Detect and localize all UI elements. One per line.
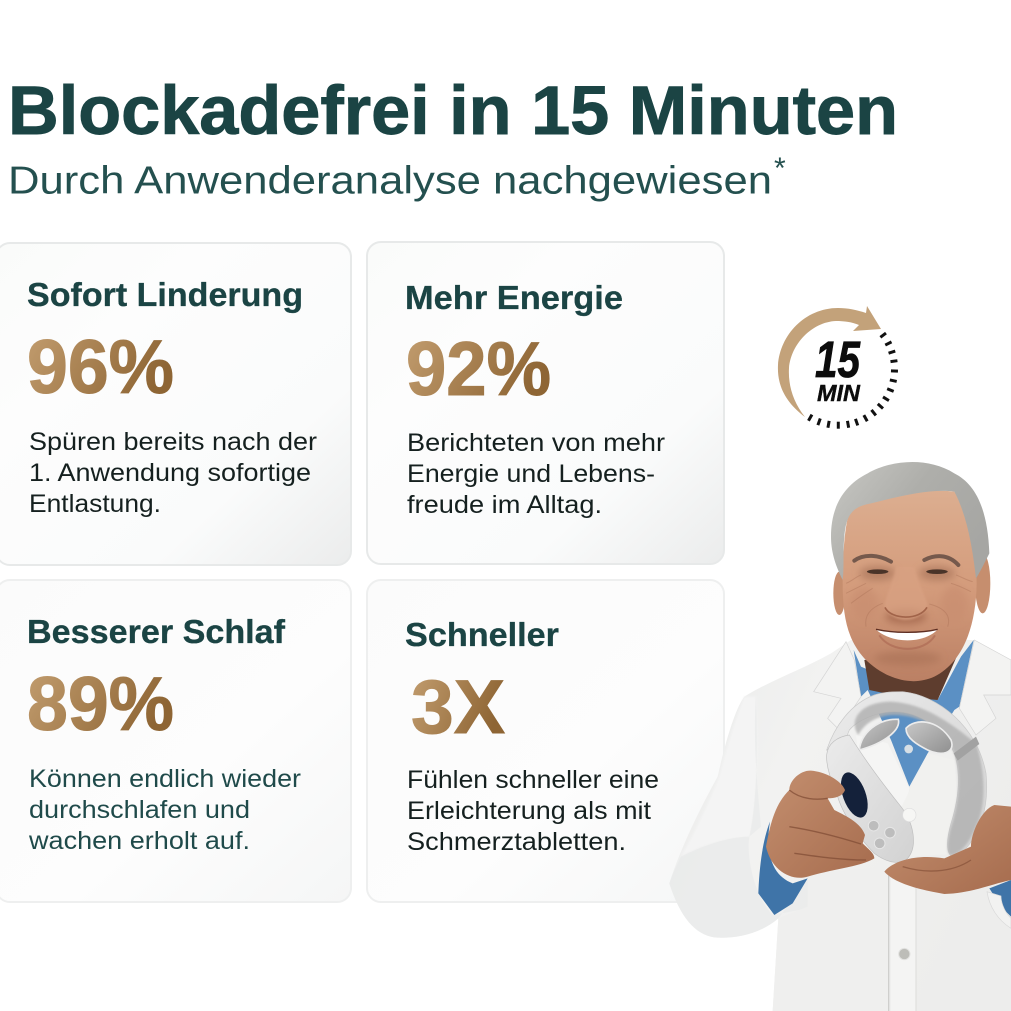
text: Schneller description: Schmerztabletten. (407, 828, 626, 856)
stat: 92%: 92% (406, 327, 551, 412)
timer ticks (807, 332, 898, 429)
heading: Besserer Schlaf: Besserer Schlaf (27, 613, 286, 650)
face (843, 491, 977, 681)
shirt and neck (854, 640, 974, 787)
left hand (766, 771, 874, 878)
text: Mehr Energie description: Energie und Lebens- (407, 460, 655, 488)
coat and shirt buttons (899, 745, 916, 960)
eyes (867, 569, 948, 574)
display (836, 769, 873, 821)
panel: Mehr Energie (367, 242, 724, 564)
eyebrows (854, 556, 958, 565)
text: Besserer Schlaf description (28, 765, 301, 855)
text: Sofort Linderung description: Spüren bereits nach der (29, 428, 317, 456)
stat: 3X: 3X (411, 665, 505, 750)
wrinkles (846, 575, 973, 627)
text: Besserer Schlaf description: Können endlich wieder (29, 765, 301, 793)
arrow arc (778, 306, 881, 417)
smile (876, 629, 938, 649)
control body (827, 735, 913, 862)
text: Sofort Linderung description: 1. Anwendung sofortige (29, 459, 311, 487)
heading: Sofort Linderung: Sofort Linderung (27, 276, 303, 313)
text: Mehr Energie description: Berichteten von mehr (407, 429, 665, 457)
panel: Schneller (367, 580, 724, 902)
stat: 96%: 96% (27, 325, 174, 410)
text: Mehr Energie description: freude im Alltag. (407, 491, 602, 519)
shirt cuffs (758, 822, 1011, 917)
neck massager (827, 692, 987, 862)
panel: Besserer Schlaf (0, 580, 351, 902)
title: Blockadefrei in 15 Minuten (8, 72, 898, 149)
text: Schneller description: Erleichterung als mit (407, 797, 651, 825)
stat: 89%: 89% (27, 662, 174, 747)
icon: 15 minute timer (778, 306, 898, 429)
text: Sofort Linderung description (29, 428, 317, 518)
heading: Mehr Energie: Mehr Energie (405, 279, 623, 316)
panel: Sofort Linderung (0, 243, 351, 565)
text: Mehr Energie description (407, 429, 665, 519)
metal joint (954, 737, 979, 761)
man in lab coat holding neck massager (669, 462, 1011, 1011)
lab coat (669, 640, 1011, 1011)
nose (884, 567, 928, 620)
torso and coat (669, 640, 1011, 1011)
coat lapels (814, 640, 1011, 857)
neckband (827, 692, 987, 857)
face shading (851, 566, 968, 666)
text: Besserer Schlaf description: wachen erholt auf. (28, 827, 250, 855)
heat pads (906, 722, 952, 753)
hands and device (758, 692, 1011, 960)
heading: Schneller: Schneller (405, 616, 559, 653)
right coat cuff (987, 892, 1011, 928)
subtitle: * (774, 152, 786, 185)
text: Schneller description (407, 766, 659, 856)
subtitle: Durch Anwenderanalyse nachgewiesen (8, 160, 772, 202)
buttons (868, 820, 895, 849)
hair (831, 462, 989, 580)
text: Sofort Linderung description: Entlastung. (29, 490, 161, 518)
text: Besserer Schlaf description: durchschlafen und (29, 796, 250, 824)
ears (833, 553, 990, 615)
right hand (884, 805, 1011, 894)
head (831, 462, 990, 681)
timer label: 15: 15 (815, 331, 860, 388)
text: Schneller description: Fühlen schneller eine (407, 766, 659, 794)
timer label: MIN: MIN (817, 380, 860, 406)
